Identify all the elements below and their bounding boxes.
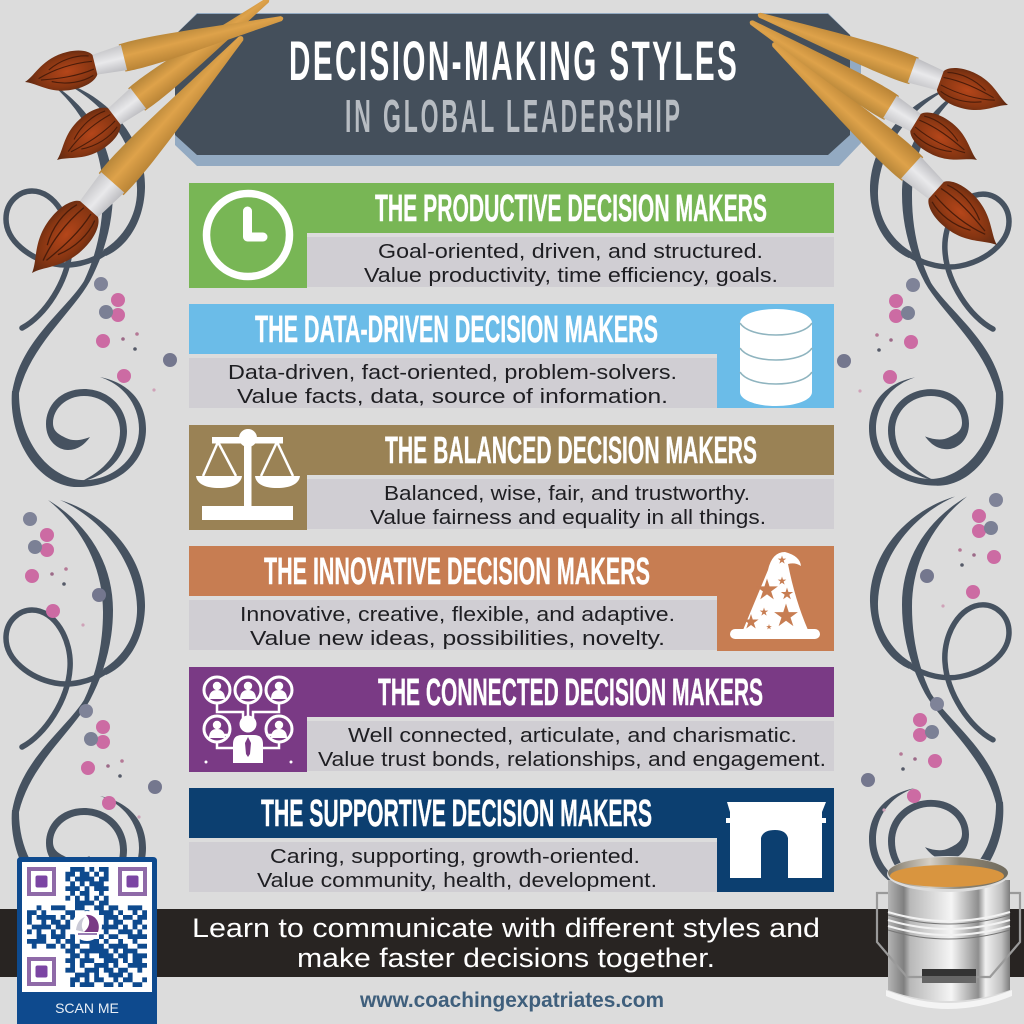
icon: scales [196,429,300,520]
title line 1: DECISION-MAKING STYLES [289,30,737,92]
icon: connected people [204,677,292,764]
panel: connected [189,667,834,772]
paint bucket [877,856,1020,1009]
right paint splatter dots [837,278,1003,812]
handle grip [922,969,976,983]
QR centre logo [72,911,102,941]
description [240,603,675,650]
panel: innovative [189,546,834,651]
icon: clock [206,194,290,276]
icon: wizard hat [730,552,820,639]
icon: database [740,309,812,406]
description [318,724,826,771]
icon: triumphal arch [726,802,826,878]
footer band [0,909,1024,977]
right paintbrushes [740,0,1014,261]
description: Value facts, data, source of information. [237,385,668,408]
description: Data-driven, fact-oriented, problem-solvers. [228,361,677,384]
description: Value productivity, time efficiency, goals. [364,264,778,287]
paint surface [890,865,1004,887]
panel: supportive [189,788,834,892]
description: Value trust bonds, relationships, and engagement. [318,748,826,771]
description [370,482,766,529]
call to action text [192,913,820,973]
QR modules [27,869,147,985]
left swirl ornaments [6,81,146,906]
panel: data-driven [189,304,834,408]
left paintbrushes [15,0,288,288]
description: Value community, health, development. [257,869,657,892]
description: Well connected, articulate, and charismatic. [348,724,797,747]
panel: productive [189,183,834,288]
description: Value fairness and equality in all things. [370,506,766,529]
description [228,361,677,408]
bucket handle [877,893,1020,977]
description: Balanced, wise, fair, and trustworthy. [384,482,750,505]
right swirl ornaments [869,86,1009,896]
heading: THE SUPPORTIVE DECISION MAKERS [261,793,652,835]
description [364,240,778,287]
website url: www.coachingexpatriates.com [359,989,664,1012]
left paint splatter dots [23,277,177,819]
heading: THE DATA-DRIVEN DECISION MAKERS [255,309,658,351]
QR code card [17,857,157,1024]
title line 2: IN GLOBAL LEADERSHIP [345,90,680,142]
heading: THE INNOVATIVE DECISION MAKERS [264,551,650,593]
call to action text: make faster decisions together. [297,943,715,973]
call to action text: Learn to communicate with different styles and [192,913,820,943]
description [257,845,657,892]
description: Value new ideas, possibilities, novelty. [250,627,665,650]
description: Goal-oriented, driven, and structured. [378,240,763,263]
panel: balanced [189,425,834,530]
description: Caring, supporting, growth-oriented. [270,845,640,868]
description: Innovative, creative, flexible, and adaptive. [240,603,675,626]
scan me label: SCAN ME [55,1000,119,1016]
QR finder marks [27,867,147,986]
title banner [175,13,861,166]
